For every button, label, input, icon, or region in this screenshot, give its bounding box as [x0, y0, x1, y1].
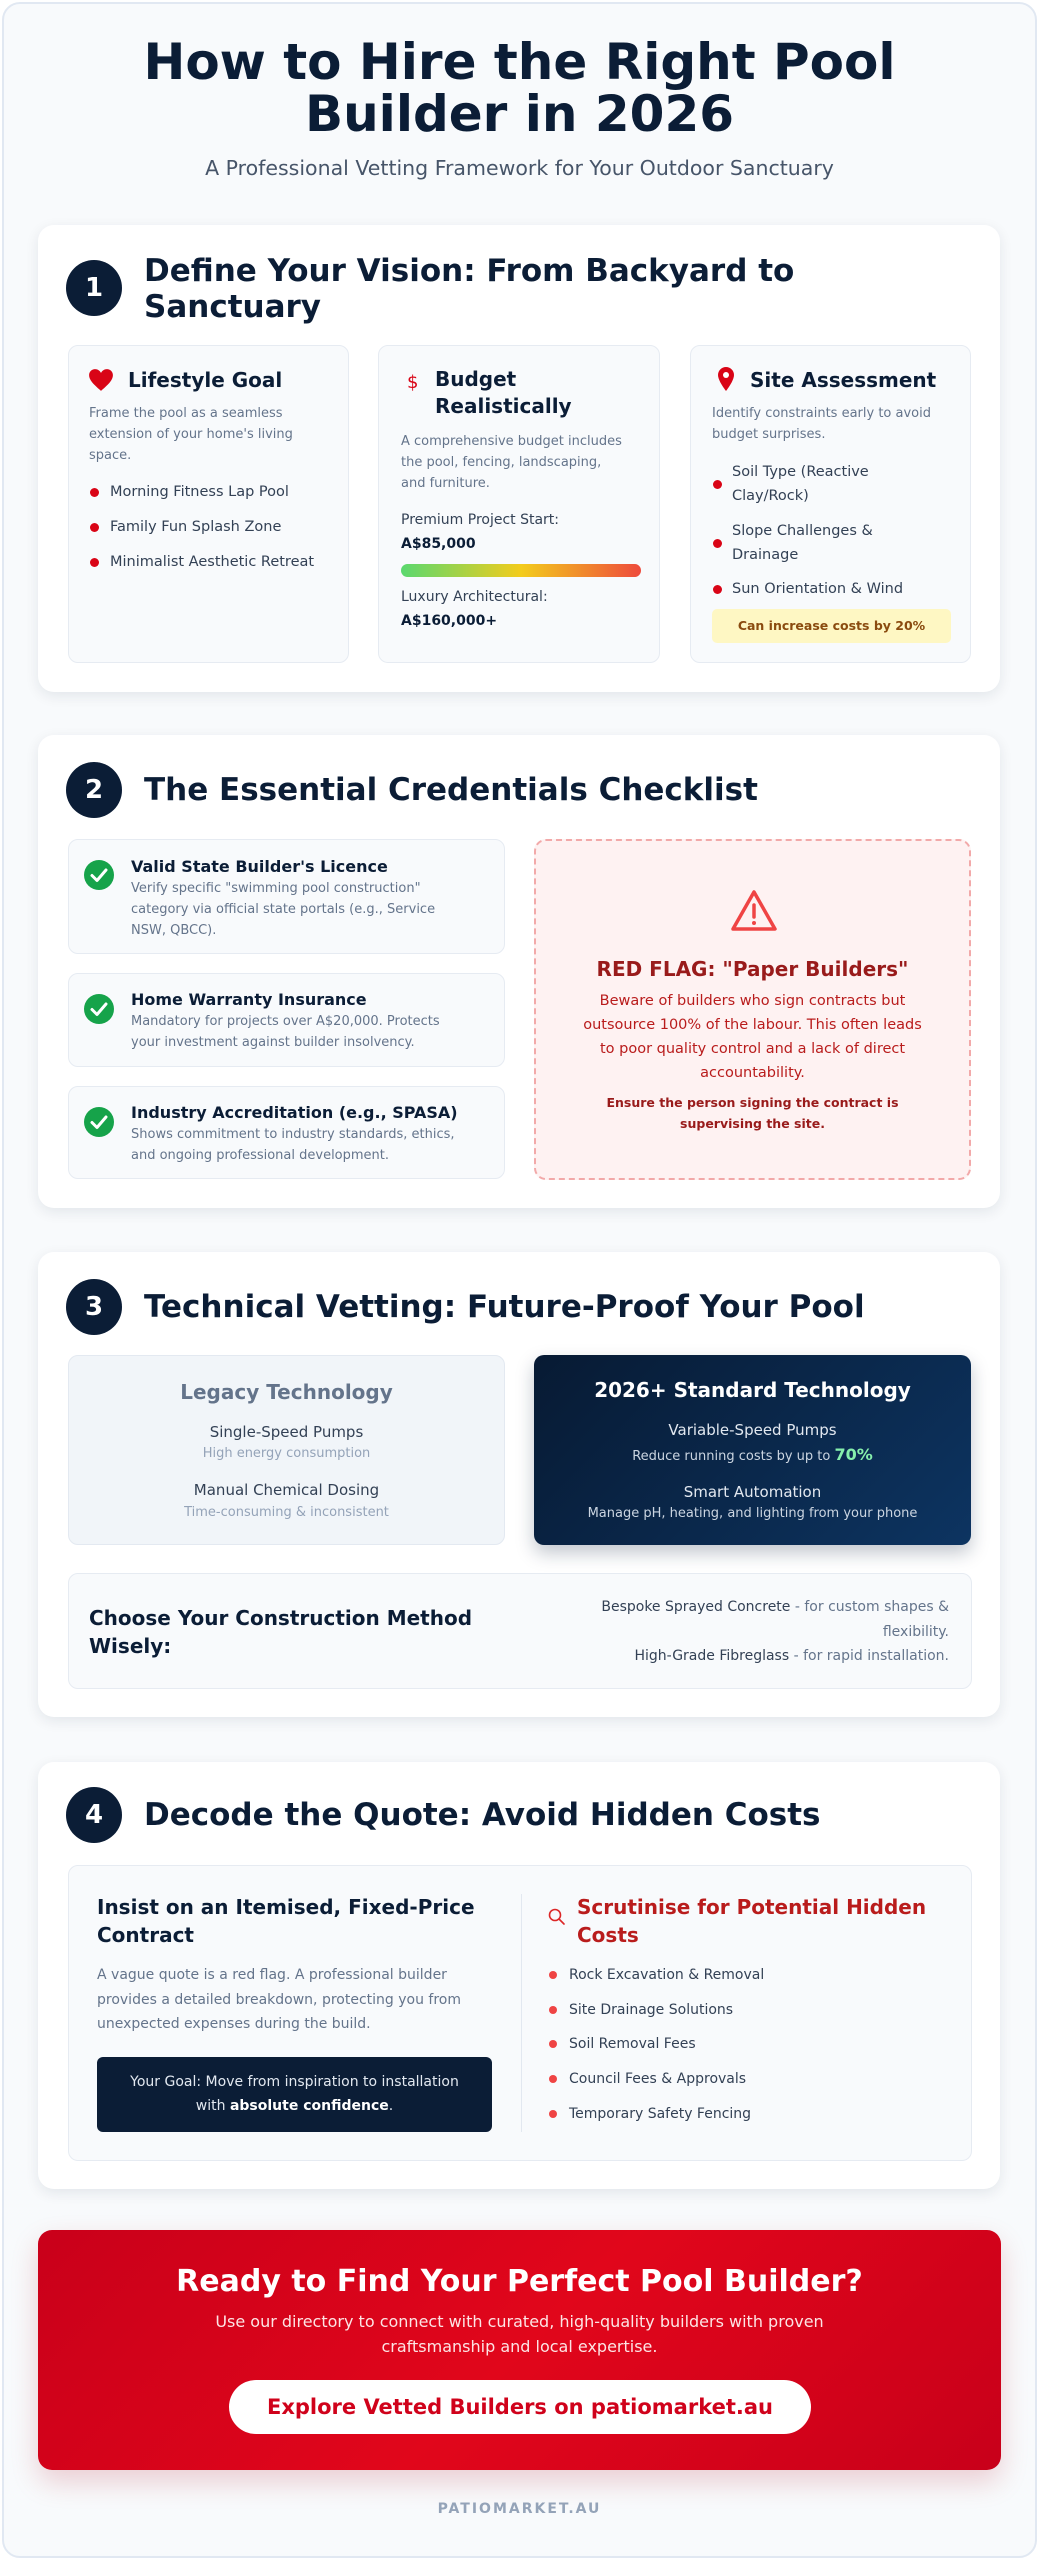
title: How to Hire the Right Pool — [143, 33, 896, 91]
gradient bar — [401, 564, 641, 577]
bullet list: hidden costs: Temporary Safety Fencing — [569, 2106, 751, 2122]
checklist item: licence: Verify specific "swimming pool construction" category via official state portals (e.g., Service NSW, QBCC). — [131, 881, 435, 938]
checklist item: warranty: Home Warranty Insurance — [131, 990, 367, 1009]
icon: check — [84, 1107, 114, 1137]
icon: magnifier — [548, 1908, 565, 1925]
number badge 3 — [66, 1279, 122, 1335]
comparison: legacy technology: Manual Chemical Dosing — [194, 1481, 379, 1499]
cta heading: Ready to Find Your Perfect Pool Builder? — [176, 2264, 863, 2299]
construction method box: Bespoke Sprayed Concrete - for custom shapes & flexibility. — [601, 1599, 949, 1640]
price range — [401, 512, 641, 629]
checklist item: warranty: Mandatory for projects over A$20,000. Protects your investment against builder insolvency. — [131, 1014, 440, 1050]
text block: Identify constraints early to avoid budget surprises. — [712, 406, 931, 442]
card: site assessment — [690, 345, 971, 663]
comparison: 2026 standard technology: Variable-Speed Pumps — [668, 1421, 837, 1439]
panel: section 3 technical vetting — [38, 1252, 1000, 1717]
cta text: Use our directory to connect with curated, high-quality builders with proven craftsmanship and local expertise. — [215, 2312, 824, 2356]
title: Builder in 2026 — [305, 85, 734, 143]
construction method box — [68, 1573, 972, 1689]
panel: section 1 define your vision — [38, 225, 1000, 692]
callout: red flag — [534, 839, 971, 1180]
callout: your goal — [97, 2057, 492, 2132]
comparison: 2026 standard technology — [534, 1355, 971, 1545]
comparison: 2026 standard technology: 2026+ Standard Technology — [594, 1378, 911, 1402]
comparison: legacy technology: Legacy Technology — [180, 1380, 393, 1404]
checklist item: licence — [68, 839, 505, 954]
callout: red flag: Ensure the person signing the contract is supervising the site. — [606, 1095, 899, 1131]
bullet list: hidden costs: Council Fees & Approvals — [569, 2071, 746, 2087]
number badge 4: 4 — [85, 1800, 103, 1830]
bullet list: Slope Challenges & Drainage — [732, 523, 873, 563]
number badge 2 — [66, 762, 122, 818]
checklist item: accreditation: Industry Accreditation (e.g., SPASA) — [131, 1103, 458, 1122]
left column: fixed-price contract — [97, 1895, 492, 2132]
number badge 4 — [66, 1787, 122, 1843]
number badge 3: 3 — [85, 1292, 103, 1322]
price range: A$85,000 — [401, 536, 476, 552]
number badge 1: 1 — [85, 273, 103, 303]
right column: hidden costs: Scrutinise for Potential Hidden Costs — [577, 1895, 926, 1947]
bullet list: Family Fun Splash Zone — [110, 519, 281, 535]
checklist item: accreditation: Shows commitment to industry standards, ethics, and ongoing professional development. — [131, 1127, 455, 1163]
cta button — [229, 2380, 811, 2434]
heading: site: Site Assessment — [750, 368, 936, 392]
title — [143, 33, 896, 143]
text block: A comprehensive budget includes the pool, fencing, landscaping, and furniture. — [401, 434, 622, 491]
icon: pin — [718, 367, 734, 391]
comparison: legacy technology: Time-consuming & inconsistent — [184, 1505, 389, 1520]
panel: section 2 credentials — [38, 735, 1000, 1208]
construction method box: Choose Your Construction Method Wisely: — [89, 1606, 472, 1658]
comparison: 2026 standard technology: Reduce running costs by up to 70% — [632, 1445, 873, 1464]
bullet list: Sun Orientation & Wind — [732, 581, 903, 597]
cta button: Explore Vetted Builders on patiomarket.au — [267, 2395, 773, 2419]
price range: A$160,000+ — [401, 613, 497, 629]
construction method box: High-Grade Fibreglass - for rapid installation. — [634, 1648, 949, 1664]
bullet list — [713, 464, 903, 597]
left column: fixed-price contract: Insist on an Itemised, Fixed-Price Contract — [97, 1895, 475, 1947]
card: budget realistically — [378, 345, 660, 663]
price range: Premium Project Start: — [401, 512, 559, 528]
bullet list — [90, 484, 314, 570]
panel: call to action — [38, 2230, 1001, 2470]
icon: check — [84, 994, 114, 1024]
bullet list: hidden costs: Site Drainage Solutions — [569, 2002, 733, 2018]
callout: your goal: with absolute confidence. — [196, 2098, 393, 2114]
checklist item: warranty — [68, 973, 505, 1067]
icon: check — [84, 860, 114, 890]
card: lifestyle goal — [68, 345, 349, 663]
subtitle: A Professional Vetting Framework for Your Outdoor Sanctuary — [205, 156, 834, 180]
callout: cost increase: Can increase costs by 20% — [738, 618, 925, 633]
checklist item: accreditation — [68, 1086, 505, 1179]
comparison: legacy technology — [68, 1355, 505, 1545]
bullet list: Morning Fitness Lap Pool — [110, 484, 289, 500]
heading 4: Decode the Quote: Avoid Hidden Costs — [144, 1797, 821, 1833]
inner quote box — [68, 1865, 972, 2161]
comparison: 2026 standard technology: Manage pH, heating, and lighting from your phone — [588, 1506, 917, 1521]
heading 3: Technical Vetting: Future-Proof Your Pool — [144, 1289, 865, 1325]
comparison: 2026 standard technology: Smart Automation — [684, 1483, 821, 1501]
right column: hidden costs — [548, 1895, 926, 2122]
heading 2: The Essential Credentials Checklist — [144, 772, 758, 808]
panel: section 4 decode the quote — [38, 1762, 1000, 2189]
heading: budget: Budget — [435, 367, 516, 391]
icon: warning — [731, 890, 777, 931]
bullet list: Minimalist Aesthetic Retreat — [110, 554, 314, 570]
text block: Frame the pool as a seamless extension of your home's living space. — [89, 406, 293, 463]
icon: heart — [89, 369, 113, 391]
icon: dollar: $ — [407, 372, 418, 393]
heading: lifestyle goal: Lifestyle Goal — [128, 368, 282, 392]
bullet list: hidden costs: Rock Excavation & Removal — [569, 1967, 764, 1983]
comparison: legacy technology: Single-Speed Pumps — [210, 1423, 363, 1441]
left column: fixed-price contract: A vague quote is a red flag. A professional builder provides a detailed breakdown, protecting you from unexpected expenses during the build. — [97, 1967, 461, 2032]
heading: budget — [435, 367, 572, 418]
number badge 1 — [66, 260, 122, 316]
heading 1: Define Your Vision: From Backyard to Sanctuary — [144, 253, 794, 325]
bullet list: Soil Type (Reactive Clay/Rock) — [732, 464, 869, 504]
callout: cost increase — [712, 609, 951, 643]
callout: red flag: Beware of builders who sign contracts but outsource 100% of the labour. This often leads to poor quality control and a lack of direct accountability. — [583, 993, 922, 1081]
checklist item: licence: Valid State Builder's Licence — [131, 857, 388, 876]
callout: your goal: Your Goal: Move from inspiration to installation — [130, 2074, 459, 2090]
bullet list: hidden costs: Soil Removal Fees — [569, 2036, 696, 2052]
comparison: legacy technology: High energy consumption — [203, 1446, 370, 1461]
price range: Luxury Architectural: — [401, 589, 548, 605]
heading: budget: Realistically — [435, 394, 572, 418]
bullet list: hidden costs — [549, 1967, 764, 2122]
callout: red flag: RED FLAG: "Paper Builders" — [597, 957, 908, 981]
footer: PATIOMARKET.AU — [438, 2501, 601, 2517]
number badge 2: 2 — [85, 775, 103, 805]
